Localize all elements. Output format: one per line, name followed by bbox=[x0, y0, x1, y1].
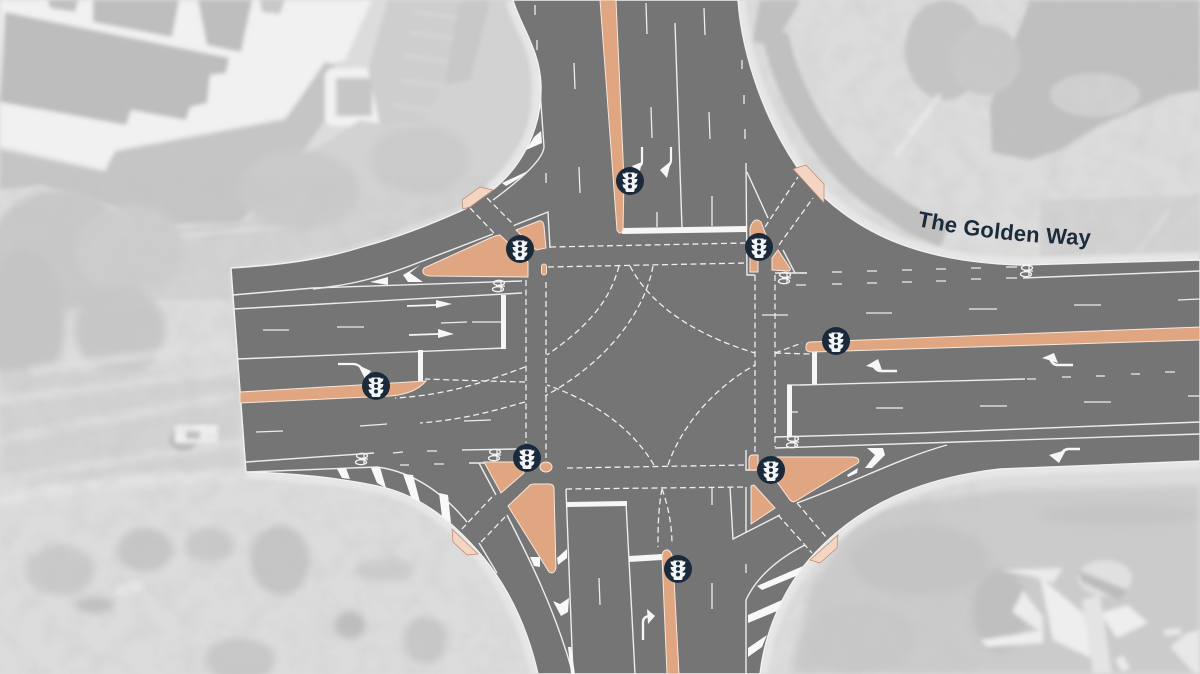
arrow heads: north approach bbox=[632, 161, 671, 178]
dashed lane lines bbox=[256, 3, 1200, 609]
icon: bicycle, south-west far bbox=[356, 453, 368, 465]
icon: bicycle, east far bbox=[1020, 265, 1033, 277]
bicycle lane symbols bbox=[356, 265, 1033, 465]
street label: The Golden Way: The Golden Way bbox=[920, 211, 1091, 250]
north-west large island bbox=[423, 235, 528, 277]
aerial: south-west trees bbox=[0, 510, 520, 674]
icon: traffic light, north-east bbox=[745, 233, 773, 261]
arrows: west approach bbox=[407, 300, 454, 338]
aerial: south-east trees bbox=[790, 485, 1200, 674]
pedestrian ramps at corners bbox=[452, 165, 838, 563]
icon: traffic light, south median bbox=[664, 555, 692, 583]
kerb verge bands bbox=[246, 0, 1200, 674]
north-east right island bbox=[772, 250, 790, 271]
icon: traffic light, east median bbox=[822, 327, 850, 355]
icon: traffic light, north-west bbox=[506, 235, 534, 263]
south-east large island bbox=[770, 457, 859, 502]
icon: traffic light, west median bbox=[362, 372, 390, 400]
aerial: north-east lawn and trees bbox=[752, 0, 1200, 262]
west median bbox=[240, 381, 426, 403]
icon: traffic light, south-east bbox=[757, 456, 785, 484]
zebra hatching and chevrons bbox=[337, 131, 885, 674]
north median bbox=[600, 0, 624, 233]
arrows: north approach bbox=[636, 147, 671, 168]
south-west small island bbox=[484, 462, 524, 493]
icon: bicycle, north-west bbox=[492, 280, 505, 292]
arrow: west turn lane bbox=[338, 364, 371, 379]
south-east tiny island bbox=[749, 455, 758, 470]
road arrows bbox=[338, 147, 1080, 640]
icon: bicycle, east near bbox=[778, 272, 791, 284]
icon: bicycle, south-east bbox=[786, 436, 799, 448]
icon: bicycle, south-west near bbox=[488, 449, 501, 461]
south median bbox=[662, 550, 679, 674]
arrows: east approach bbox=[866, 353, 1080, 463]
aerial: north-west building and car park bbox=[0, 0, 530, 300]
traffic signal icons bbox=[362, 167, 850, 583]
stop bars bbox=[418, 226, 817, 562]
south-east small island bbox=[751, 485, 775, 524]
aerial: western trees and road bbox=[0, 125, 470, 500]
north-west small island bbox=[516, 221, 546, 250]
north-west dot island bbox=[542, 264, 546, 275]
median islands bbox=[240, 0, 1200, 674]
icon: traffic light, north median bbox=[616, 167, 644, 195]
arrow: south approach bbox=[643, 609, 655, 640]
east median bbox=[806, 327, 1200, 352]
south-west large island bbox=[508, 484, 556, 573]
south-west dot island bbox=[540, 462, 552, 472]
north-east left island bbox=[750, 220, 766, 272]
icon: traffic light, south-west bbox=[513, 444, 541, 472]
solid lane lines bbox=[233, 23, 1200, 674]
crosswalk and turning guide lines bbox=[395, 177, 827, 553]
aerial: south-east houses bbox=[980, 560, 1200, 674]
aerial: vehicle on western road bbox=[169, 425, 218, 451]
